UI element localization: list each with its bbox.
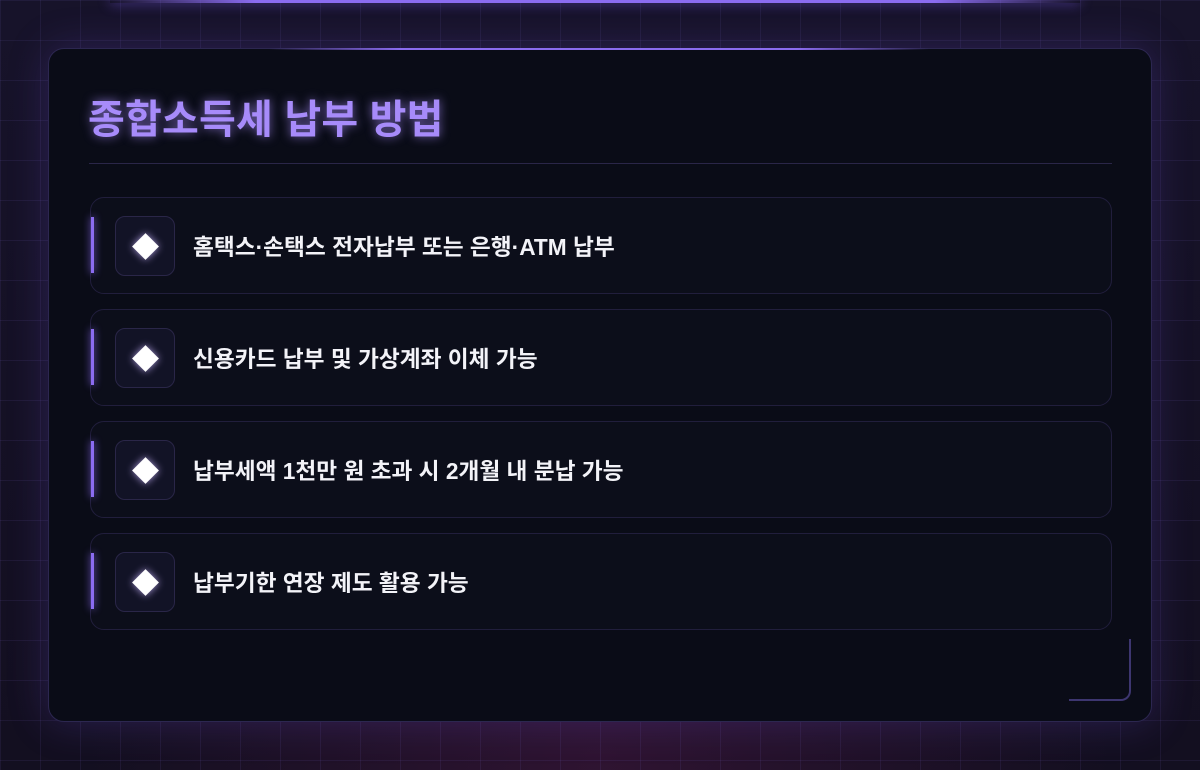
corner bracket (1069, 639, 1131, 701)
item 1 (90, 197, 1112, 294)
icon: diamond (115, 328, 175, 388)
item 3 (90, 421, 1112, 518)
text 2: 신용카드 납부 및 가상계좌 이체 가능 (193, 346, 538, 372)
title: 종합소득세 납부 방법 (88, 98, 444, 142)
icon: diamond (115, 216, 175, 276)
item 4 (90, 533, 1112, 630)
item 2 (90, 309, 1112, 406)
text 4: 납부기한 연장 제도 활용 가능 (193, 570, 469, 596)
text 1: 홈택스·손택스 전자납부 또는 은행·ATM 납부 (193, 234, 615, 260)
icon: diamond (115, 440, 175, 500)
icon: diamond (115, 552, 175, 612)
text 3: 납부세액 1천만 원 초과 시 2개월 내 분납 가능 (193, 458, 624, 484)
